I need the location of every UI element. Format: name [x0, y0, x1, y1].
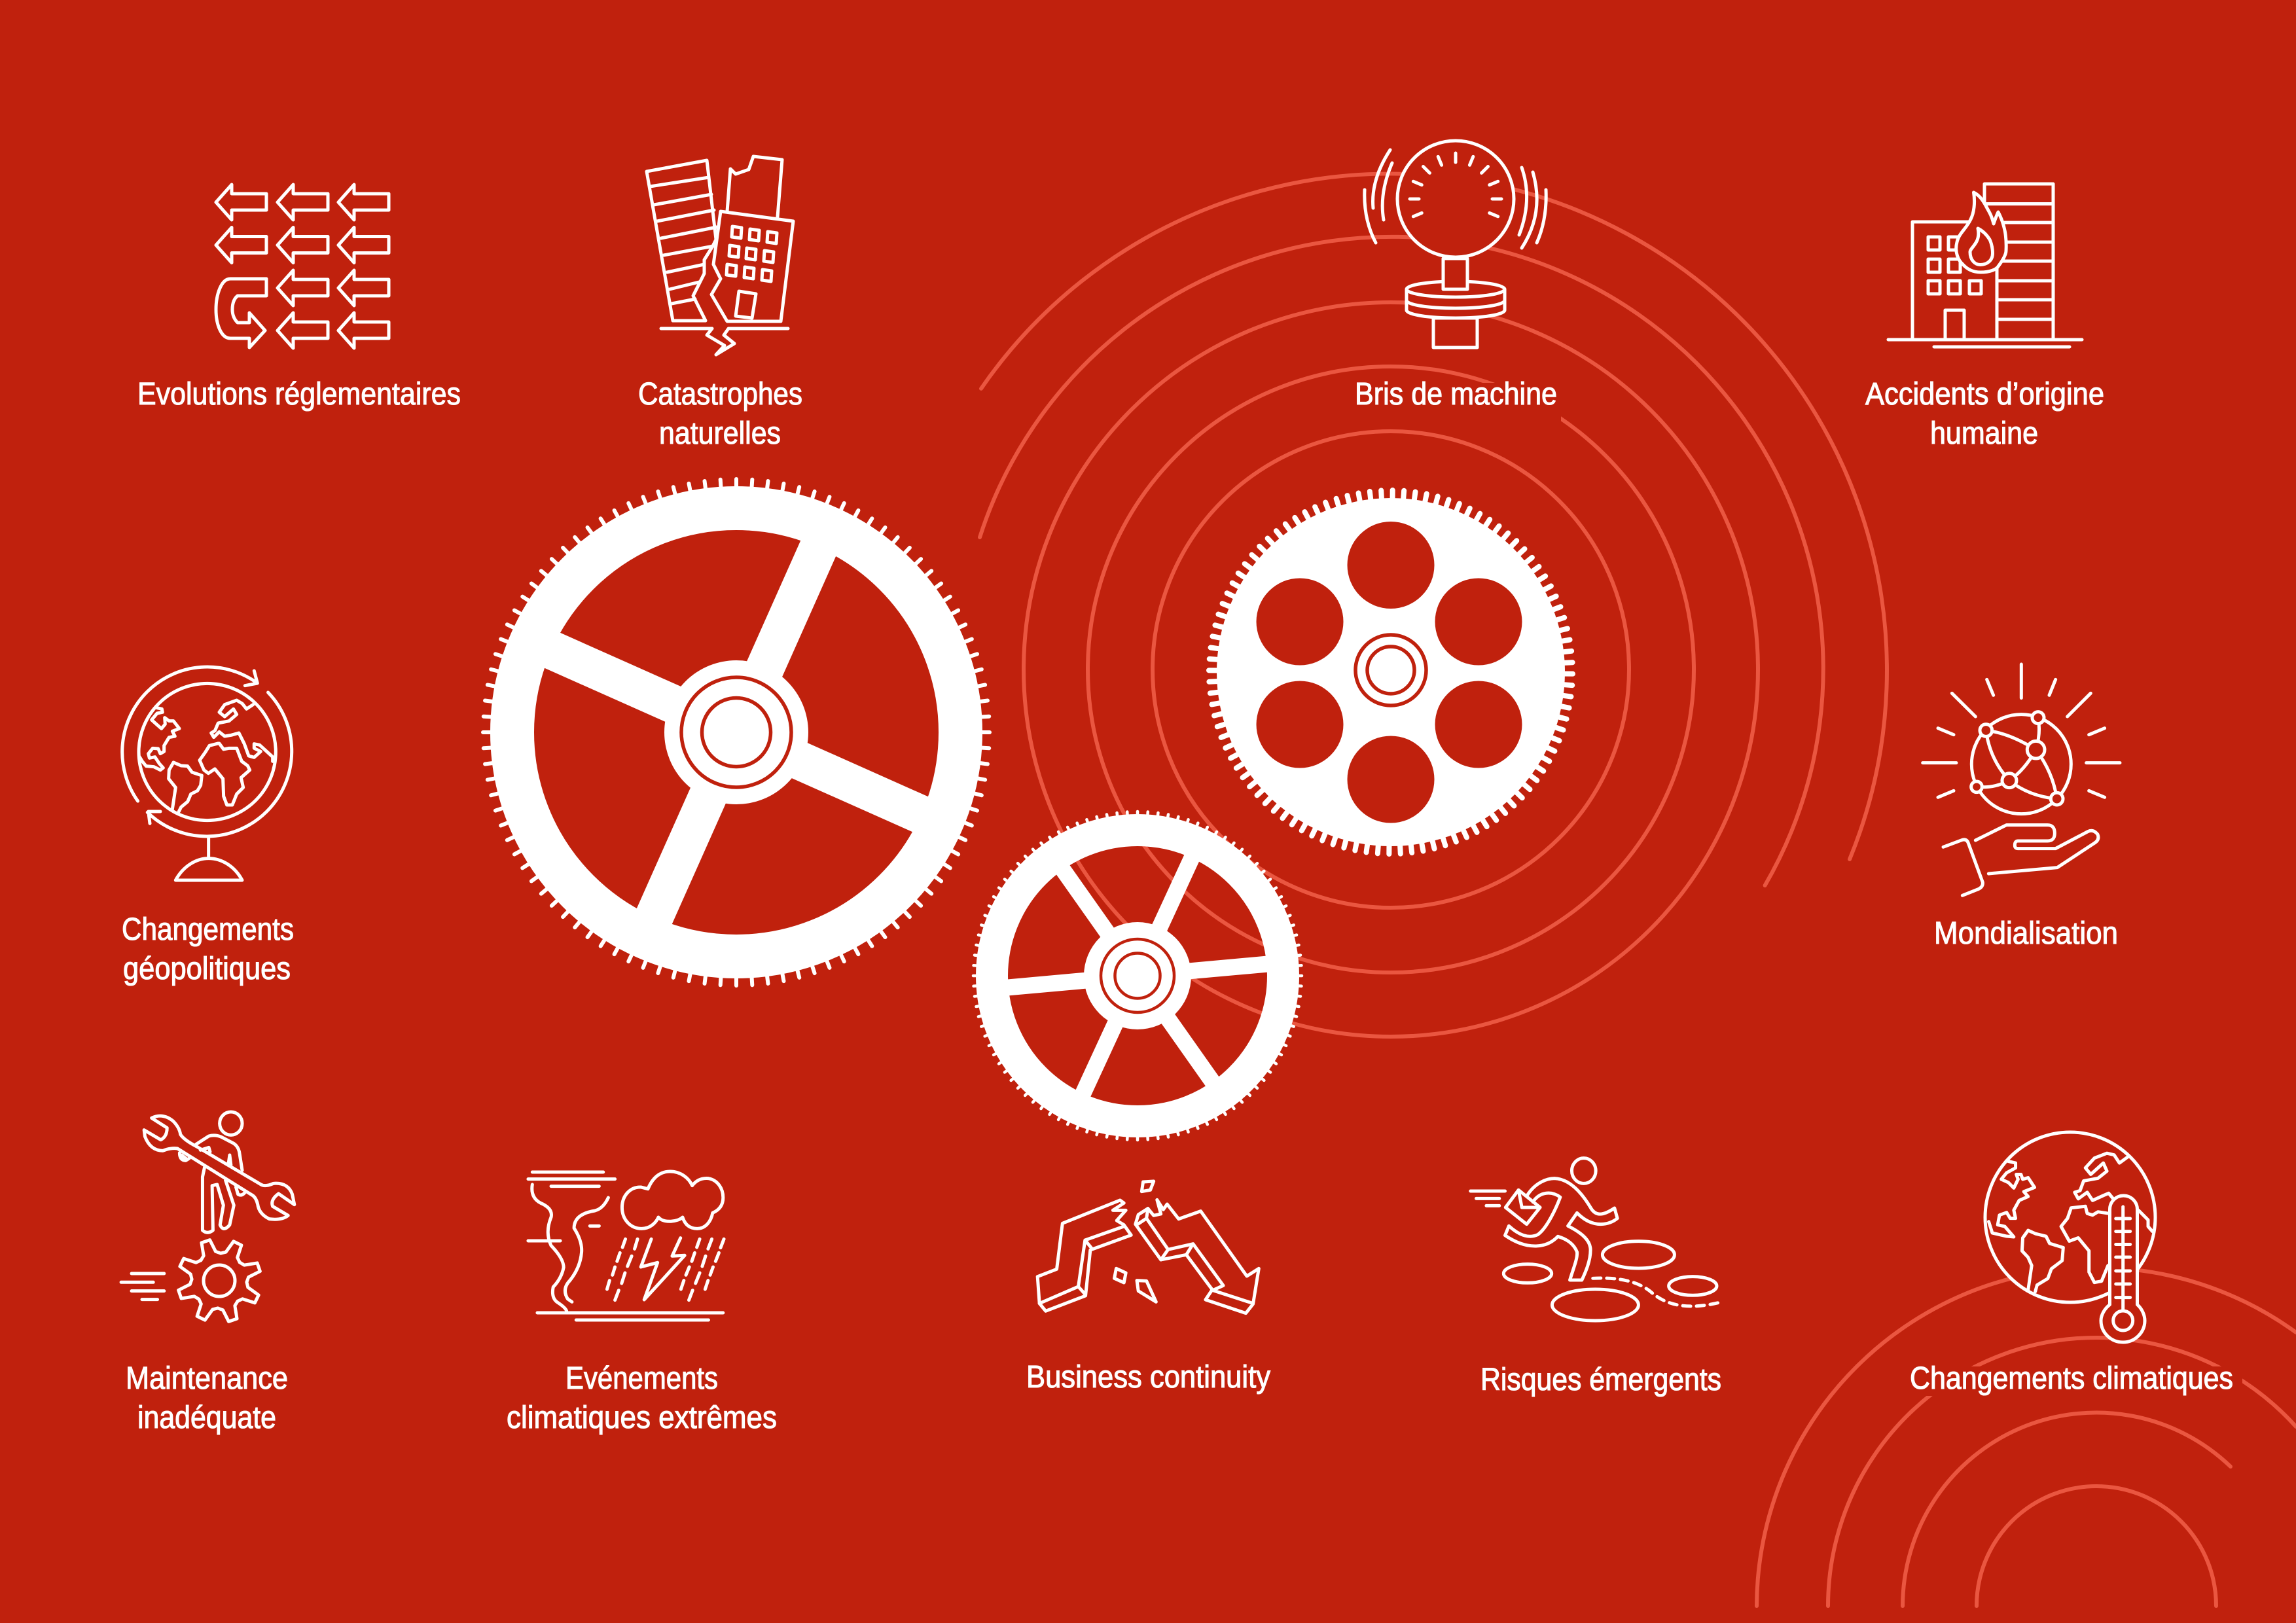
- label: Evolutions réglementaires: [137, 377, 461, 412]
- large gear: [476, 472, 997, 993]
- icon: arrows: [216, 185, 389, 348]
- item: Maintenance inadéquate: [121, 1112, 295, 1435]
- item: Changements climatiques: [1910, 1132, 2233, 1396]
- icon: building on fire: [1888, 184, 2082, 347]
- icon: desk globe: [122, 667, 292, 880]
- item: Changements géopolitiques: géopolitiques: [123, 952, 291, 986]
- label: Evénements: [565, 1361, 718, 1396]
- item: Evénements climatiques extrêmes: climatiques extrêmes: [507, 1400, 777, 1435]
- label: Catastrophes: [638, 377, 802, 412]
- concentric arcs around the central gears: [980, 173, 1887, 1037]
- icon: tornado, cloud and lightning: [528, 1171, 724, 1320]
- icon: worker with wrench and gear: [121, 1112, 295, 1300]
- item: Accidents d’origine humaine: [1865, 184, 2104, 451]
- icon: vibrating gauge: [1365, 141, 1546, 348]
- icon: runner on stepping stones: [1471, 1158, 1720, 1321]
- item: Business continuity: [1026, 1181, 1270, 1395]
- small gear: [969, 807, 1306, 1145]
- item: Evolutions réglementaires: [137, 185, 461, 412]
- icon: network globe over hand: [1923, 664, 2120, 895]
- label: Changements: [122, 912, 294, 947]
- item: Bris de machine: [1355, 141, 1557, 412]
- medium gear with six holes: [1202, 484, 1579, 861]
- label: Accidents d’origine: [1865, 377, 2104, 412]
- item: Changements géopolitiques: [122, 667, 294, 986]
- item: Catastrophes naturelles: [638, 156, 802, 451]
- icon: broken arrow: [1037, 1181, 1259, 1313]
- label: Risques émergents: [1480, 1363, 1721, 1397]
- icon: earth with thermometer: [1985, 1132, 2155, 1342]
- item: Accidents d’origine humaine: humaine: [1930, 416, 2038, 451]
- item: Mondialisation: [1923, 664, 2120, 951]
- item: Catastrophes naturelles: naturelles: [659, 416, 781, 451]
- label: Maintenance: [126, 1361, 288, 1396]
- concentric arcs bottom right: [1757, 1268, 2296, 1606]
- label: Changements climatiques: [1910, 1361, 2233, 1396]
- item: Evénements climatiques extrêmes: [507, 1171, 777, 1435]
- label: Business continuity: [1026, 1360, 1270, 1395]
- icon: gear: [174, 1236, 264, 1326]
- label: Mondialisation: [1934, 916, 2118, 951]
- item: Maintenance inadéquate: inadéquate: [137, 1400, 276, 1435]
- icon: earthquake buildings: [647, 156, 793, 355]
- label: Bris de machine: [1355, 377, 1557, 412]
- item: Risques émergents: [1471, 1158, 1721, 1397]
